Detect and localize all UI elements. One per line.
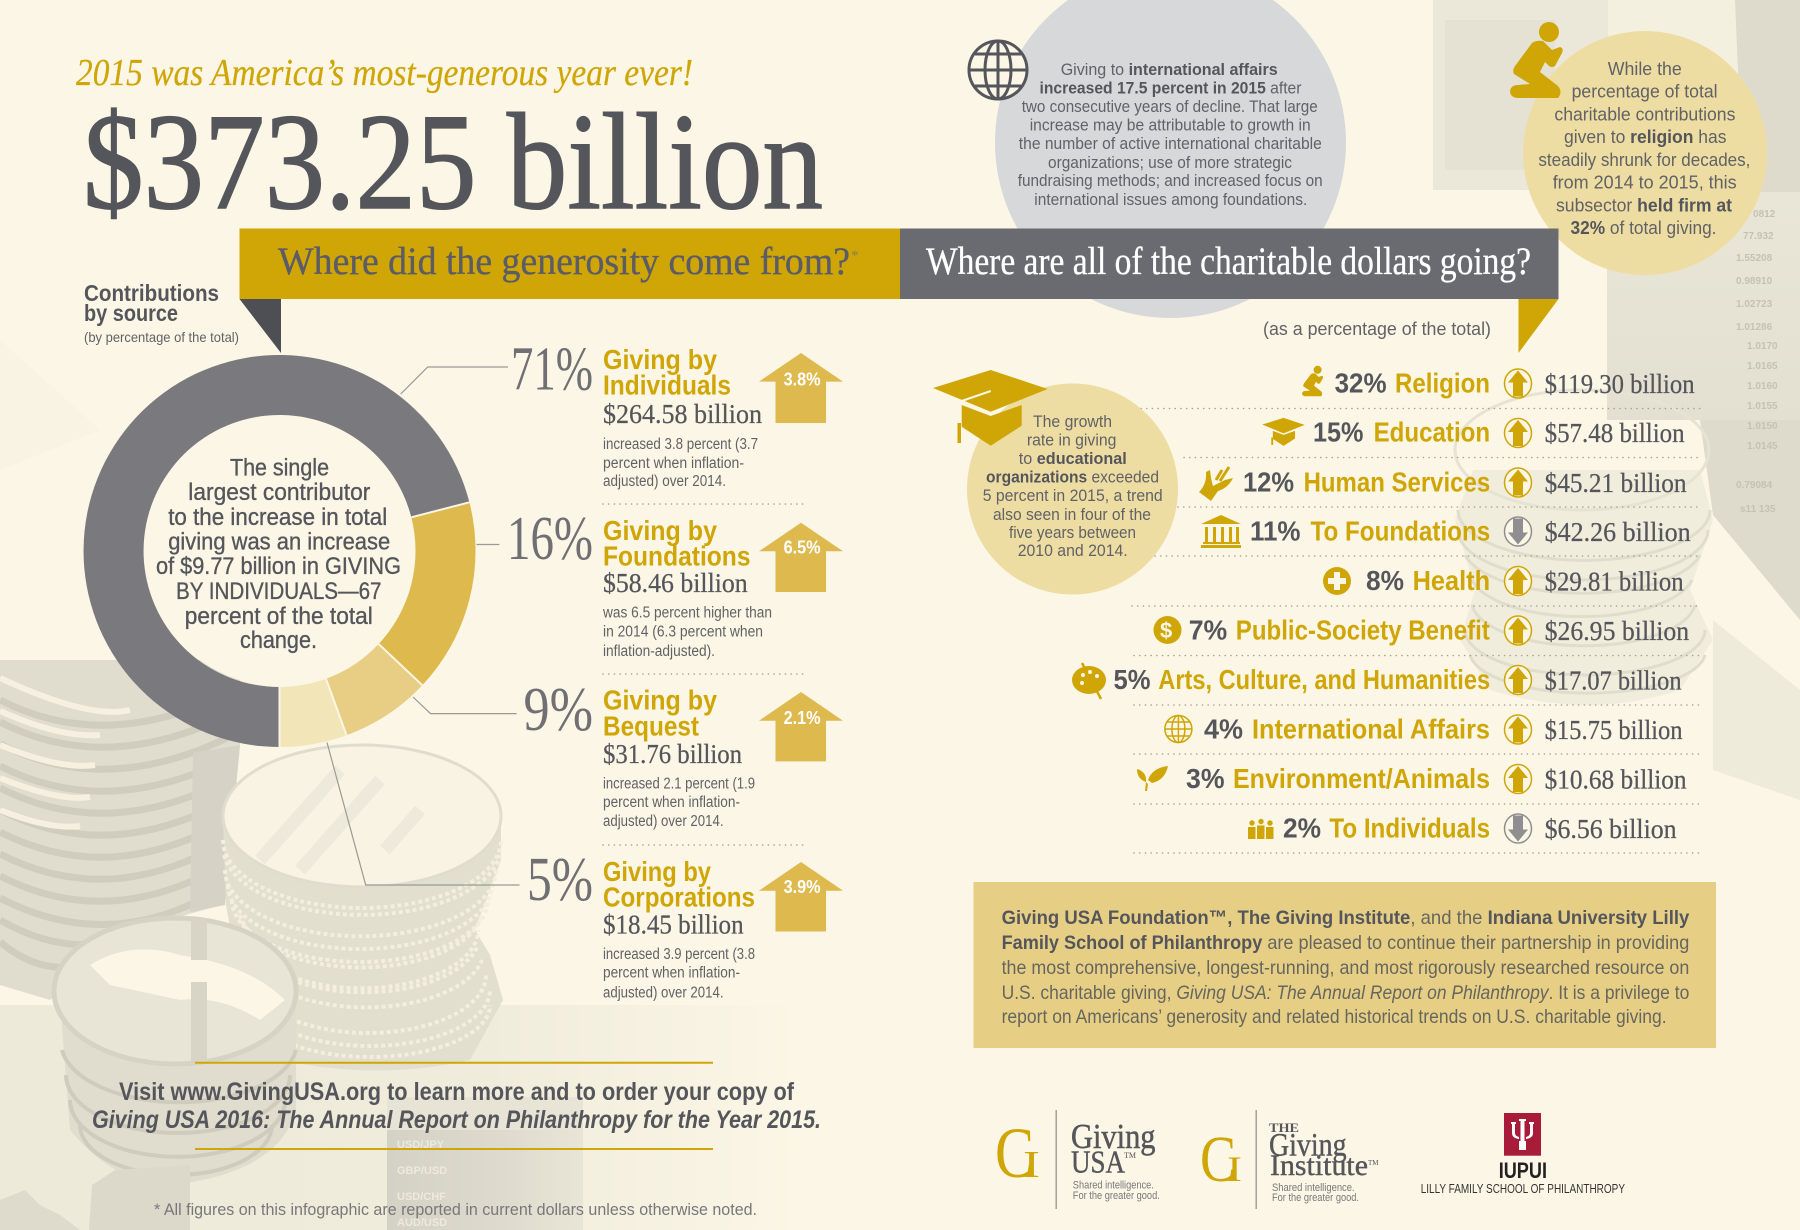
source: giving by corporations: adjusted) over 2014. [603, 984, 724, 1002]
row: environment and animals: $10.68 billion [1545, 764, 1687, 794]
row: health: Health [1413, 565, 1490, 596]
icon: down arrow [1504, 517, 1532, 546]
arrow: 3.8% [759, 353, 843, 423]
text: education: 2010 and 2014. [1018, 541, 1128, 560]
source: giving by corporations: 5% [527, 846, 593, 914]
arrow: 6.5%: 6.5% [784, 538, 821, 558]
row: education [1262, 417, 1685, 448]
logo: IUPUI Lilly Family School of Philanthropy [1421, 1113, 1625, 1196]
text: religion: from 2014 to 2015, this [1553, 173, 1737, 193]
text: international affairs: international issues among foundations. [1034, 190, 1307, 209]
row: human services: Human Services [1304, 466, 1490, 498]
background: coins and financial imagery: 1.0145 [1747, 441, 1778, 452]
row: to foundations: To Foundations [1310, 516, 1490, 546]
banner: where are the dollars going: Where are all of the charitable dollars going? [926, 240, 1531, 283]
row: human services: $45.21 billion [1545, 468, 1687, 498]
text: international affairs: Giving to international affairs [1061, 60, 1278, 79]
panel: partnership statement: report on Americans’ generosity and related historical trends on U.S. charitable giving. [1002, 1006, 1667, 1028]
logo: IUPUI Lilly Family School of Philanthropy: LILLY FAMILY SCHOOL OF PHILANTHROPY [1421, 1181, 1625, 1196]
call to action: visit GivingUSA: Visit www.GivingUSA.org to learn more and to order your copy of [119, 1078, 795, 1106]
text: donut centre: to the increase in total [168, 504, 387, 531]
source: giving by bequest: Giving by [603, 685, 717, 716]
row: education: $57.48 billion [1545, 418, 1685, 448]
logo: Giving USA: USA [1071, 1144, 1125, 1180]
icon: up arrow [1504, 715, 1532, 744]
icon: small globe [1165, 716, 1192, 742]
text: international affairs: the number of active international charitable [1019, 134, 1322, 153]
logo: The Giving Institute [1200, 1110, 1379, 1209]
logo: The Giving Institute: I [1227, 1149, 1242, 1189]
source: giving by corporations: Giving by [603, 856, 711, 887]
background: coins and financial imagery: 77.932 [1743, 231, 1774, 242]
arrow: 2.1%: 2.1% [784, 708, 821, 728]
panel: education circle [933, 370, 1178, 594]
logo: Giving USA [995, 1110, 1160, 1209]
title: most generous year: 2015 was America’s most-generous year ever! [76, 52, 693, 94]
source: giving by individuals: adjusted) over 2014. [603, 473, 726, 490]
leader lines from donut to percentages [327, 367, 520, 885]
text: religion: given to religion has [1564, 127, 1726, 147]
background: coins and financial imagery: s11 135 [1740, 504, 1776, 515]
source: giving by individuals: Giving by [603, 344, 717, 375]
text: religion: 32% of total giving. [1570, 218, 1716, 238]
source: giving by individuals [511, 336, 843, 490]
logo: The Giving Institute: For the greater good. [1272, 1192, 1359, 1204]
row: to individuals: $6.56 billion [1545, 814, 1677, 844]
text: donut centre: The single [230, 455, 329, 482]
source: giving by corporations [527, 846, 843, 1002]
source: giving by bequest: Bequest [603, 711, 699, 742]
text: international affairs: organizations; use of more strategic [1048, 153, 1292, 172]
text: donut centre: BY INDIVIDUALS—67 [176, 578, 382, 605]
row: to foundations [1201, 515, 1691, 548]
background: coins and financial imagery: 1.0170 [1747, 341, 1778, 352]
text: education: The growth [1033, 412, 1112, 431]
background: coins and financial imagery: 1.01286 [1736, 322, 1773, 333]
text: education [983, 412, 1163, 560]
source: giving by corporations: Corporations [603, 882, 755, 913]
source: giving by bequest: percent when inflation- [603, 794, 740, 811]
row: education: 15% [1313, 417, 1364, 448]
background: coins and financial imagery: 1.0150 [1747, 421, 1778, 432]
text: education: rate in giving [1027, 431, 1116, 450]
icon: dollar [1154, 616, 1182, 644]
source: giving by foundations: in 2014 (6.3 percent when [603, 624, 763, 640]
source: giving by foundations: Giving by [603, 515, 717, 546]
background: coins and financial imagery: 0.79084 [1736, 480, 1773, 491]
row: arts: $17.07 billion [1545, 666, 1682, 696]
source: giving by individuals: increased 3.8 percent (3.7 [603, 436, 758, 453]
icon: up arrow [1504, 616, 1532, 645]
icon: graduation cap [933, 370, 1048, 446]
row: arts [1072, 663, 1682, 699]
background: coins and financial imagery: USD/CHF [397, 1191, 446, 1203]
banner: where did the generosity come from: * [851, 248, 858, 264]
panel: partnership statement: the most comprehensive, longest-running, and most rigorously researched resource on [1002, 957, 1689, 979]
icon: kneeling figure [1510, 22, 1563, 98]
text: religion: subsector held firm at [1556, 196, 1732, 216]
icon: health cross [1323, 567, 1351, 595]
background: coins and financial imagery: AUD/USD [397, 1217, 447, 1229]
source: giving by bequest: $31.76 billion [603, 739, 742, 769]
icon: up arrow [1504, 468, 1532, 497]
row: health: 8% [1366, 565, 1404, 596]
background: coins and financial imagery: GBP/USD [397, 1165, 447, 1177]
logo: Giving USA: For the greater good. [1073, 1190, 1160, 1202]
row: public-society benefit: Public-Society Benefit [1236, 615, 1490, 646]
background: coins and financial imagery: USD/JPY [397, 1139, 445, 1151]
row: public-society benefit [1154, 615, 1690, 646]
source: giving by corporations: percent when inflation- [603, 965, 740, 982]
icon: palette [1072, 663, 1106, 699]
panel: international affairs circle [969, 0, 1346, 318]
icon: dollar: $ [1160, 618, 1172, 643]
icon: cap small [1262, 418, 1305, 446]
panel: religion circle [1510, 22, 1767, 275]
icon: hands [1199, 467, 1233, 501]
row: international affairs: $15.75 billion [1545, 715, 1683, 745]
row: health: $29.81 billion [1545, 566, 1684, 596]
text: religion: steadily shrunk for decades, [1538, 150, 1750, 170]
source: giving by bequest: 9% [524, 676, 593, 744]
icon: up arrow [1504, 369, 1532, 398]
dotted row dividers [1132, 408, 1701, 853]
row: to foundations: 11% [1250, 516, 1301, 546]
heading: contributions by source [84, 280, 239, 345]
row: to foundations: $42.26 billion [1545, 517, 1691, 547]
text: donut centre: percent of the total [185, 603, 373, 630]
background: coins and financial imagery: 1.0160 [1747, 381, 1778, 392]
heading: contributions by source: Contributions [84, 280, 219, 306]
icon: up arrow [1504, 764, 1532, 794]
logo: The Giving Institute: Institute [1270, 1149, 1368, 1182]
arrow: 6.5% [759, 523, 843, 592]
source: giving by foundations [507, 505, 843, 660]
icon: up arrow [1504, 418, 1532, 448]
text: international affairs: fundraising methods; and increased focus on [1018, 171, 1323, 190]
background: coins and financial imagery: 1.02723 [1736, 299, 1773, 310]
arrow: 3.9% [759, 862, 843, 932]
icon: kneeling figure small [1302, 366, 1323, 396]
logo: Giving USA: I [1023, 1144, 1040, 1186]
icon: up arrow [1504, 566, 1532, 596]
text: education: to educational [1019, 449, 1127, 468]
text: education: also seen in four of the [993, 505, 1151, 524]
row: international affairs: International Affairs [1252, 714, 1490, 744]
row: international affairs [1165, 714, 1683, 745]
logo: The Giving Institute: TM [1368, 1159, 1379, 1167]
row: human services: 12% [1243, 466, 1294, 498]
row: religion [1302, 366, 1695, 399]
banner: where are the dollars going [900, 228, 1558, 353]
arrow: 2.1% [759, 692, 843, 761]
text: religion: charitable contributions [1554, 105, 1735, 125]
row: public-society benefit: $26.95 billion [1545, 616, 1690, 646]
source: giving by foundations: 16% [507, 505, 593, 573]
heading: contributions by source: (by percentage of the total) [84, 329, 239, 345]
arrow: 3.9%: 3.9% [784, 877, 821, 897]
headline: total giving: $373.25 billion [83, 85, 823, 238]
logo: Giving USA: C [995, 1113, 1034, 1193]
row: to individuals: 2% [1283, 812, 1321, 843]
logo: Giving USA: Giving [1071, 1117, 1156, 1156]
row: religion: Religion [1395, 368, 1490, 399]
row: human services [1199, 466, 1687, 501]
icon: down arrow [1504, 814, 1532, 843]
logo: Giving USA: Shared intelligence. [1073, 1180, 1154, 1192]
text: religion [1538, 59, 1750, 238]
banner: where did the generosity come from: Where did the generosity come from? [278, 240, 850, 283]
panel: partnership statement [974, 882, 1716, 1048]
text: education: 5 percent in 2015, a trend [983, 486, 1163, 505]
logo: The Giving Institute: Shared intelligence. [1272, 1182, 1355, 1194]
row: to individuals: To Individuals [1329, 812, 1490, 843]
source: giving by foundations: Foundations [603, 540, 750, 571]
logo: IUPUI Lilly Family School of Philanthropy: IUPUI [1499, 1158, 1547, 1183]
arrow: 3.8%: 3.8% [784, 370, 821, 390]
banner: where did the generosity come from [240, 228, 900, 353]
row: public-society benefit: 7% [1189, 615, 1227, 646]
icon: people [1248, 819, 1274, 839]
background: coins and financial imagery: 1.0155 [1747, 401, 1778, 412]
icon: globe [969, 41, 1027, 99]
row: environment and animals: 3% [1186, 763, 1225, 794]
background: coins and financial imagery: 0.98910 [1736, 276, 1773, 287]
icon: leaves [1137, 766, 1168, 791]
icon: building [1201, 515, 1241, 548]
call to action: visit GivingUSA [92, 1063, 821, 1149]
panel: partnership statement: Giving USA Foundation™, The Giving Institute, and the Indiana University Lilly [1002, 907, 1689, 929]
source: giving by foundations: inflation-adjusted). [603, 643, 715, 660]
text: education: five years between [1009, 523, 1136, 542]
row: arts: 5% [1114, 664, 1151, 695]
text: religion: While the [1608, 59, 1682, 79]
footnote: * All figures on this infographic are reported in current dollars unless otherwise noted. [154, 1200, 757, 1219]
source: giving by foundations: $58.46 billion [603, 568, 748, 598]
row: environment and animals: Environment/Animals [1233, 763, 1490, 794]
source: giving by individuals: $264.58 billion [603, 399, 762, 429]
source: giving by individuals: Individuals [603, 370, 731, 401]
logo: The Giving Institute: THE [1269, 1120, 1299, 1135]
source: giving by bequest: adjusted) over 2014. [603, 813, 724, 830]
source: giving by bequest: increased 2.1 percent (1.9 [603, 776, 755, 793]
panel: partnership statement: U.S. charitable giving, Giving USA: The Annual Report on Philanthropy. It is a privilege to [1002, 982, 1689, 1004]
source: giving by corporations: $18.45 billion [603, 909, 744, 939]
row: religion: $119.30 billion [1545, 369, 1695, 399]
donut chart: contributions by source [84, 355, 476, 747]
heading: contributions by source: by source [84, 300, 178, 326]
row: arts: Arts, Culture, and Humanities [1158, 664, 1490, 695]
text: religion: percentage of total [1572, 82, 1718, 102]
row: to individuals [1248, 812, 1677, 844]
source: giving by bequest [524, 676, 843, 830]
text: donut centre: giving was an increase [168, 529, 390, 556]
row: education: Education [1374, 417, 1490, 448]
row: environment and animals [1137, 763, 1687, 794]
text: donut centre: largest contributor [188, 479, 370, 506]
text: donut centre: change. [240, 627, 317, 654]
text: international affairs [1018, 60, 1323, 209]
background: coins and financial imagery: 1.55208 [1736, 253, 1773, 264]
text: education: organizations exceeded [986, 467, 1159, 486]
icon: up arrow [1504, 666, 1532, 694]
call to action: visit GivingUSA: Giving USA 2016: The Annual Report on Philanthropy for the Year 2015. [92, 1106, 821, 1134]
source: giving by individuals: percent when inflation- [603, 455, 744, 472]
panel: partnership statement: Family School of Philanthropy are pleased to continue their partnership in providing [1002, 932, 1689, 954]
source: giving by foundations: was 6.5 percent higher than [602, 605, 772, 622]
logo: Giving USA: TM [1124, 1151, 1136, 1160]
text: international affairs: two consecutive years of decline. That large [1022, 97, 1318, 116]
logo: The Giving Institute: Giving [1269, 1128, 1347, 1164]
background: coins and financial imagery: 0812 [1753, 209, 1776, 220]
source: giving by individuals: 71% [511, 336, 593, 404]
text: donut centre [156, 455, 401, 654]
text: international affairs: increase may be attributable to growth in [1030, 116, 1311, 134]
label: as a percentage of the total: (as a percentage of the total) [1263, 319, 1491, 339]
row: religion: 32% [1335, 368, 1387, 399]
source: giving by corporations: increased 3.9 percent (3.8 [603, 946, 755, 963]
text: international affairs: increased 17.5 percent in 2015 after [1040, 79, 1302, 98]
logo: The Giving Institute: C [1200, 1123, 1236, 1196]
row: health [1323, 565, 1684, 596]
background: coins and financial imagery: 1.0165 [1747, 361, 1778, 372]
text: donut centre: of $9.77 billion in GIVING [156, 553, 401, 580]
row: international affairs: 4% [1204, 714, 1243, 744]
